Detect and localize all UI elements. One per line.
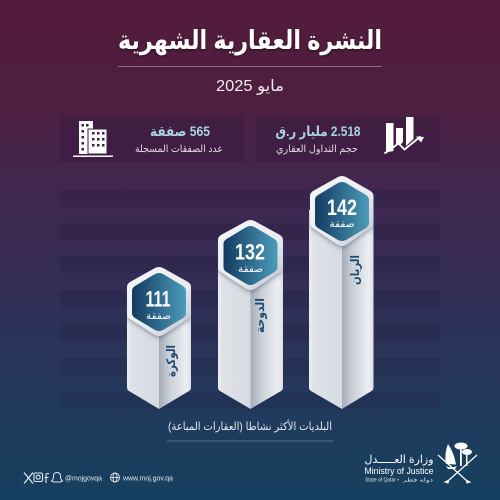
title: النشرة العقارية الشهرية	[118, 25, 382, 56]
panel: registered deals	[60, 117, 244, 162]
deals value: 565 صفقة	[150, 123, 210, 139]
column: Al Rayyan	[309, 176, 374, 409]
handle: @mojgovqa	[65, 474, 103, 482]
footer: Ministry of Justice logo	[364, 442, 477, 484]
caption divider	[167, 440, 333, 442]
state line: State of Qatar •	[365, 478, 399, 484]
emblem	[438, 442, 477, 483]
website: www.moj.gov.qa	[122, 474, 174, 482]
chart caption: البلديات الأكثر نشاطا (العقارات المباعة)	[168, 419, 332, 433]
icon: Snapchat	[52, 472, 62, 482]
unit: صفقة	[146, 311, 171, 322]
icon: Instagram	[34, 473, 42, 482]
name: الوكرة	[164, 345, 179, 377]
icon: buildings	[73, 121, 113, 157]
name: الدوحة	[253, 298, 268, 333]
value 132: 132	[235, 240, 265, 264]
name: الريان	[348, 255, 362, 285]
value 142: 142	[327, 195, 357, 220]
ministry name Arabic: وزارة العـــــدل	[364, 454, 434, 466]
unit: صفقة	[330, 219, 354, 230]
icon: globe	[110, 473, 120, 482]
icon: X	[24, 472, 33, 484]
date: مايو 2025	[216, 78, 284, 96]
deals caption: عدد الصفقات المسجلة	[135, 144, 223, 155]
panel: trading volume	[256, 117, 440, 162]
column: Doha	[218, 220, 283, 409]
icon: rising chart	[384, 117, 424, 154]
ministry name English: Ministry of Justice	[364, 466, 434, 477]
title divider	[118, 66, 382, 67]
volume caption: حجم التداول العقاري	[276, 144, 358, 155]
volume value: 2.518 مليار ر.ق	[276, 123, 361, 139]
value 111: 111	[146, 286, 170, 312]
column: Al Wakrah	[127, 267, 191, 409]
unit: صفقة	[238, 264, 263, 275]
background stripes	[60, 190, 440, 409]
footer: social links	[24, 472, 174, 484]
state line Arabic: دولة قطر	[401, 478, 433, 484]
icon: Facebook	[44, 474, 49, 483]
